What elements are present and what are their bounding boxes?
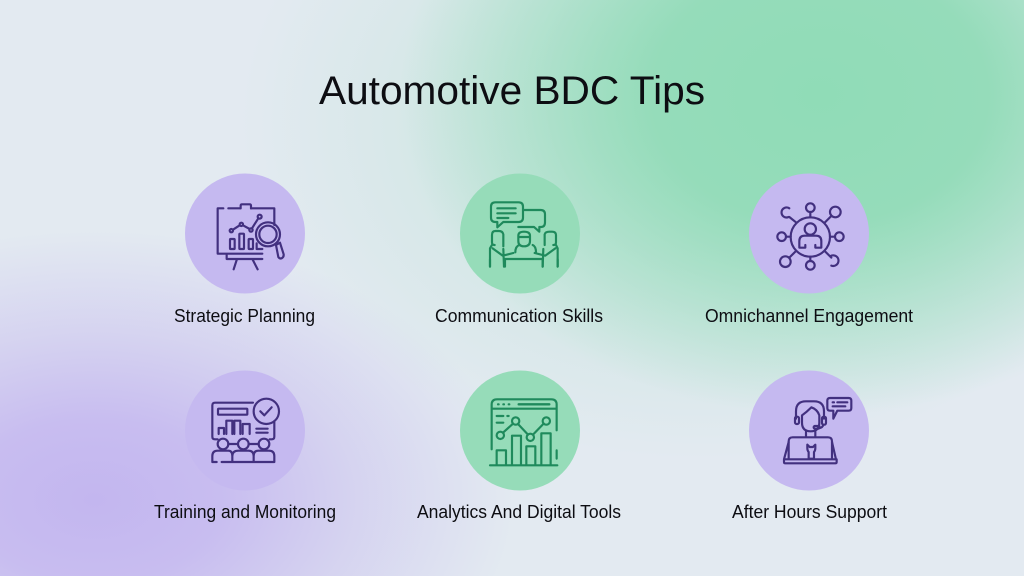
tip: Omnichannel Engagement: [705, 174, 913, 326]
tip: Strategic Planning: [174, 174, 315, 326]
label: After Hours Support: [732, 502, 887, 522]
circle: Strategic Planning: [185, 174, 305, 294]
circle: After Hours Support: [749, 370, 869, 490]
tip: Training and Monitoring: [154, 370, 336, 522]
label: Strategic Planning: [174, 306, 315, 326]
tip: Analytics And Digital Tools: [417, 370, 621, 522]
icon: support agent with headset: [784, 398, 851, 463]
tip: Communication Skills: [435, 174, 603, 326]
label: Communication Skills: [435, 306, 603, 326]
circle: Omnichannel Engagement: [749, 174, 869, 294]
label: Omnichannel Engagement: [705, 306, 913, 326]
icon: analytics browser window: [490, 399, 557, 465]
label: Training and Monitoring: [154, 502, 336, 522]
icon: network hub with person: [777, 203, 844, 270]
icon: training dashboard with check and people: [212, 399, 279, 462]
circle: Training and Monitoring: [185, 370, 305, 490]
circle: Analytics And Digital Tools: [460, 370, 580, 490]
label: Analytics And Digital Tools: [417, 502, 621, 522]
icon: presentation board with magnifier: [218, 204, 284, 269]
title: Automotive BDC Tips: [319, 69, 705, 113]
tip: After Hours Support: [732, 370, 887, 522]
icon: team conversation: [490, 202, 558, 267]
circle: Communication Skills: [460, 174, 580, 294]
